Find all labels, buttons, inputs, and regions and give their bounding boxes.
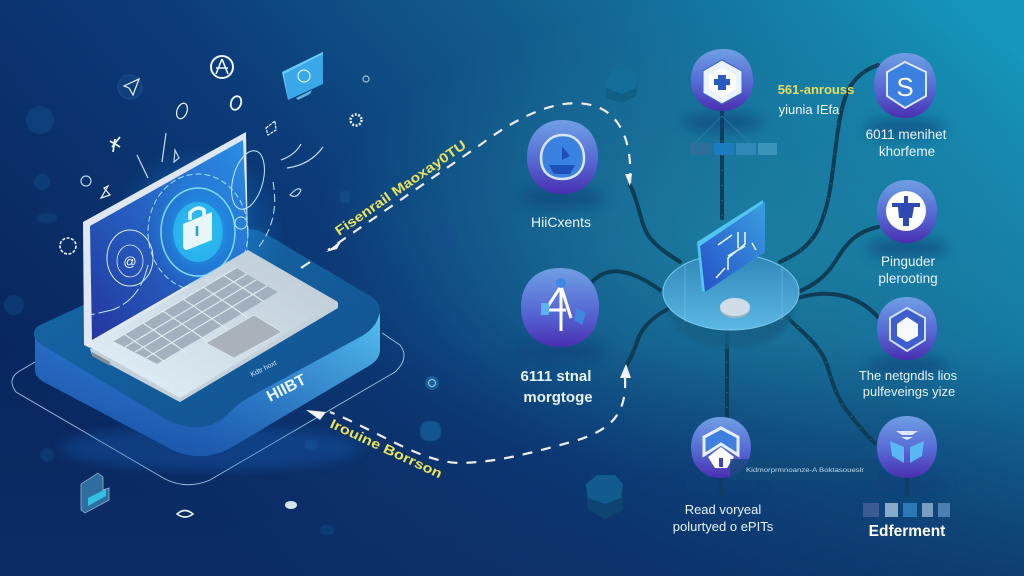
platform scribble: Kdtr hoxt <box>250 360 278 379</box>
laptop overlay arcs <box>90 147 275 315</box>
laptop lid <box>83 132 248 348</box>
laptop small at circle: @ <box>123 254 137 269</box>
node: open box <box>877 416 937 478</box>
label: khorfeme: khorfeme <box>879 144 935 159</box>
hub small white disc <box>720 300 750 318</box>
hexagonal blob top <box>606 68 638 103</box>
node: hexagon cube <box>877 297 937 360</box>
curves <box>281 144 323 168</box>
platform side <box>35 313 380 456</box>
label: morgtoge: morgtoge <box>523 389 593 406</box>
laptop base <box>90 251 338 402</box>
label: Read voryeal: Read voryeal <box>685 502 761 517</box>
label: HiiCxents: HiiCxents <box>531 214 591 230</box>
node: plug <box>877 180 937 243</box>
floating white line icons around the laptop <box>60 52 369 254</box>
hub shadow <box>669 272 793 348</box>
hub tablet <box>697 200 765 292</box>
icon: pen <box>174 150 179 162</box>
icon: blue monitor <box>282 52 323 100</box>
label: yellow heading sub: yiunia IEfa <box>779 102 840 117</box>
node: plus shield <box>691 49 753 111</box>
platform top <box>34 229 380 427</box>
icon: diamond <box>118 75 142 99</box>
labels: right network <box>521 82 958 540</box>
dashed arrow: bottom flow <box>306 364 631 463</box>
label: pulfeveings yize: pulfeveings yize <box>863 384 955 399</box>
laptop lock hologram <box>148 174 248 290</box>
platform glow <box>60 426 360 470</box>
node: house <box>691 417 751 478</box>
icon: leaf scribble <box>290 189 301 196</box>
laptop ports <box>92 352 110 366</box>
caption bar between bottom nodes <box>730 459 878 480</box>
network cables <box>592 65 907 495</box>
label: polurtyed o ePITs: polurtyed o ePITs <box>673 519 774 534</box>
laptop keyboard <box>113 268 278 364</box>
laptop small at circle <box>107 230 153 286</box>
laptop screen glow <box>110 144 286 320</box>
laptop touchpad <box>206 315 282 358</box>
bottom left icons <box>81 380 436 517</box>
icon: star <box>101 186 110 198</box>
laptop <box>83 132 338 402</box>
icon: oval bold <box>229 95 243 111</box>
arrowhead: platform end <box>306 410 326 420</box>
label: 6111 stnal: 6111 stnal <box>521 368 591 385</box>
node shadows <box>516 112 947 495</box>
node: mortgage mast <box>521 268 599 347</box>
platform <box>34 229 380 470</box>
small icon strip above Edferment <box>863 503 950 517</box>
arrowhead: hub end <box>625 174 632 186</box>
yellow rotated label: top arrow: Fisenrail Maoxay0TU <box>332 137 469 238</box>
label: Edferment: Edferment <box>869 523 945 540</box>
arrowhead: laptop end <box>326 240 342 252</box>
label: The netgndls lios: The netgndls lios <box>859 368 958 383</box>
caption bar between bottom nodes: Kidmorprmnoanze-A Boktasoueslr <box>746 467 865 474</box>
icon: gear <box>350 114 362 126</box>
ray lines <box>137 133 166 178</box>
platform outline ring <box>12 333 404 485</box>
hexagonal blob bottom <box>586 475 623 519</box>
icon: globe scribble <box>60 238 76 254</box>
icon: white small disc <box>285 501 297 509</box>
label: Pinguder: Pinguder <box>881 254 936 269</box>
icon: ring small <box>363 76 369 82</box>
label: 6011 menihet: 6011 menihet <box>866 127 947 142</box>
small icon strip under plus node <box>690 116 777 155</box>
laptop screen <box>90 140 248 340</box>
dashed arrow: top flow <box>301 103 632 268</box>
icon: person circle <box>211 56 233 78</box>
lock icon <box>183 208 212 250</box>
icon: eye <box>177 510 193 517</box>
icon: star scribble <box>110 137 120 152</box>
icon: hexagon outline <box>266 121 276 135</box>
node: S shield <box>874 53 936 118</box>
arrowhead: hub end <box>620 364 631 378</box>
yellow rotated label: bottom arrow: Irouine Borrson <box>328 416 445 481</box>
node: water drop badge <box>527 120 598 194</box>
icon: oval <box>175 102 189 120</box>
central hub <box>663 200 799 348</box>
hub disc <box>663 254 799 330</box>
icon: ring with glyph <box>81 176 91 186</box>
icon: ghost round <box>428 380 436 386</box>
icon: blue box <box>81 473 109 513</box>
platform label: HIIBT <box>264 371 309 406</box>
decorative floating blobs <box>4 106 457 535</box>
node: S shield: S <box>896 72 914 102</box>
label: yellow heading: 561-anrouss <box>778 82 854 97</box>
label: plerooting: plerooting <box>878 271 938 286</box>
